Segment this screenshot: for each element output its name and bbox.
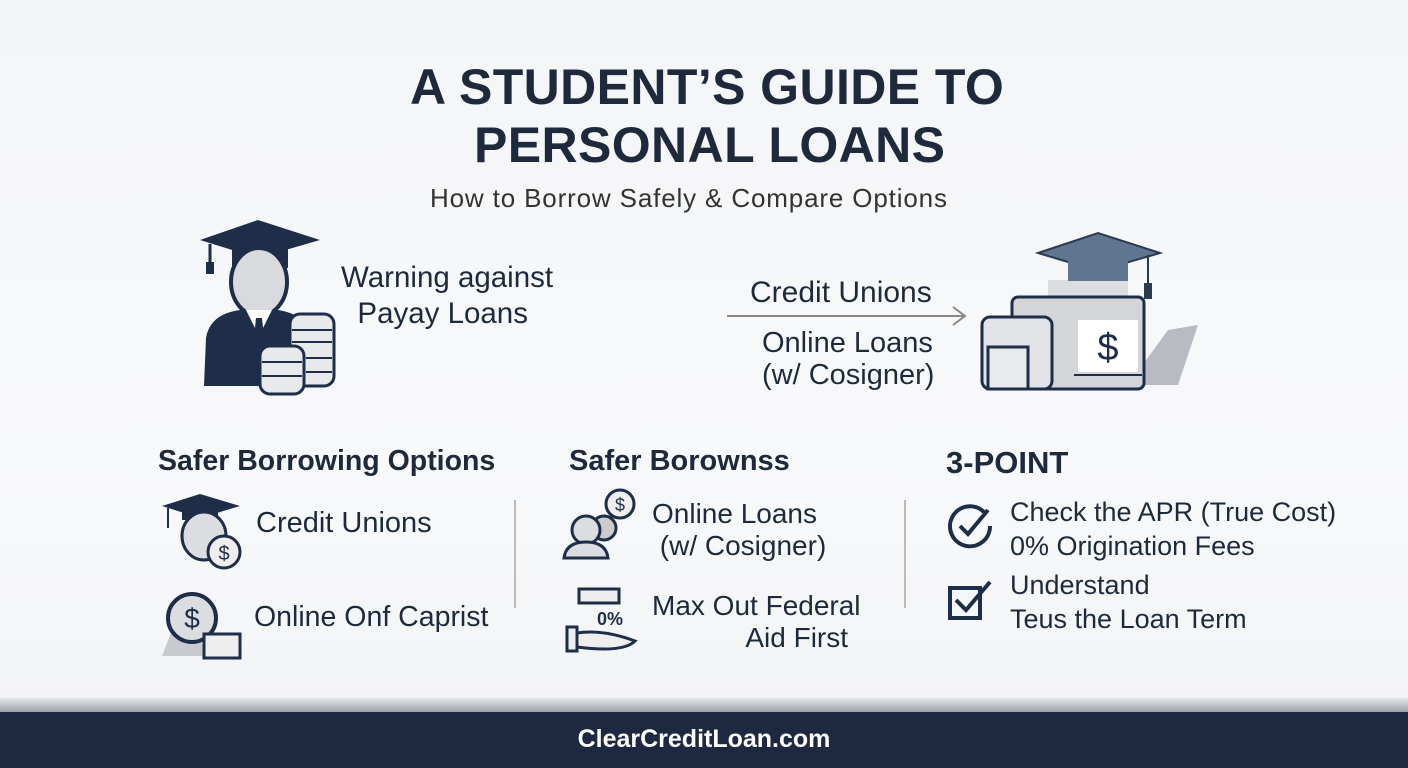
item: online loans cosigner: (w/ Cosigner) [660, 530, 826, 561]
heading: safer borownss: Safer Borownss [569, 445, 790, 477]
item: check APR [1010, 497, 1336, 561]
text: credit unions: Credit Unions [750, 276, 932, 309]
heading: safer borrowing options: Safer Borrowing Options [158, 445, 495, 477]
icon: cap + coin [162, 494, 242, 570]
title [410, 59, 1004, 173]
text: online loans: Online Loans [762, 327, 933, 359]
text: PERSONAL LOANS [474, 117, 945, 173]
icon: check circle [948, 504, 992, 548]
icon: hand 0% [566, 588, 638, 652]
arrow [727, 306, 966, 326]
heading: 3-point: 3-POINT [946, 445, 1068, 480]
text: online loans [762, 327, 934, 391]
subtitle: How to Borrow Safely & Compare Options [430, 183, 948, 213]
icon: people with coin [562, 488, 636, 560]
item: check APR: Check the APR (True Cost) [1010, 497, 1336, 527]
item: credit unions: Credit Unions [256, 507, 432, 539]
item: understand: Teus the Loan Term [1010, 604, 1247, 634]
text: warning: Warning against [341, 261, 553, 294]
icon: box with dollar: $ [1097, 327, 1119, 369]
item: understand [1010, 570, 1247, 634]
icon: cap + coin: $ [218, 543, 230, 565]
icon: checkbox [948, 580, 992, 620]
icon: box with dollar [980, 232, 1198, 390]
icon: people with coin: $ [615, 495, 625, 515]
text: A STUDENT’S GUIDE TO [410, 59, 1004, 115]
icon: coin with card: $ [184, 603, 200, 634]
item: federal aid: Aid First [745, 622, 848, 653]
icon: coin with card [162, 592, 242, 660]
icon: hand 0%: 0% [597, 609, 623, 629]
footer [0, 698, 1408, 768]
dividers [514, 500, 516, 608]
text: warning [341, 261, 553, 330]
icon: student with coins [200, 220, 336, 396]
item: federal aid [652, 590, 861, 653]
item: federal aid: Max Out Federal [652, 590, 861, 621]
footer text: ClearCreditLoan.com [578, 725, 830, 753]
item: online onf caprist: Online Onf Caprist [254, 601, 488, 633]
item: online loans cosigner [652, 498, 826, 561]
item: understand: Understand [1010, 570, 1150, 600]
item: online loans cosigner: Online Loans [652, 498, 817, 529]
text: warning: Payay Loans [357, 297, 528, 330]
text: online loans: (w/ Cosigner) [762, 359, 934, 391]
item: check APR: 0% Origination Fees [1010, 531, 1255, 561]
